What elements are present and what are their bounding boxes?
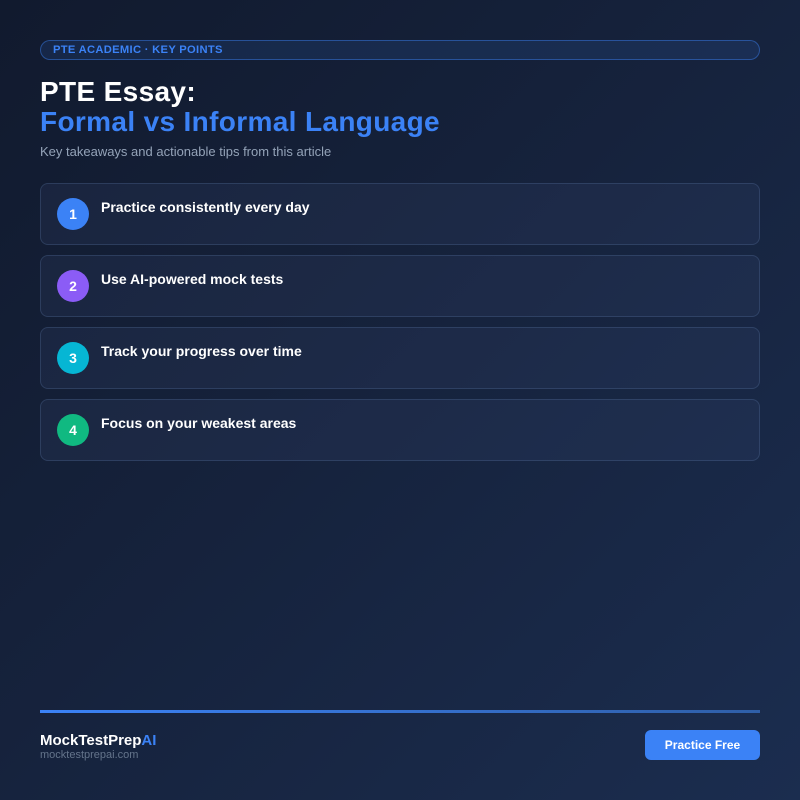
card 4: Focus on your weakest areas	[101, 415, 296, 431]
card 3: Track your progress over time	[101, 343, 302, 359]
title: PTE Essay:	[40, 76, 196, 107]
card 1: Practice consistently every day	[101, 199, 310, 215]
tag pill: PTE ACADEMIC · KEY POINTS	[53, 44, 223, 56]
card 2	[40, 255, 760, 317]
card 1: 1	[69, 206, 77, 222]
brand	[40, 732, 156, 761]
card 2: Use AI-powered mock tests	[101, 271, 283, 287]
button: Practice Free	[665, 738, 740, 752]
card 1	[40, 183, 760, 245]
brand: mocktestprepai.com	[40, 749, 138, 761]
card 4	[40, 399, 760, 461]
button	[645, 730, 760, 760]
card 4: 4	[69, 422, 77, 438]
tag pill	[40, 40, 760, 60]
card 3	[40, 327, 760, 389]
subtitle: Key takeaways and actionable tips from this article	[40, 144, 331, 159]
brand: MockTestPrepAI	[40, 732, 156, 749]
footer line	[40, 710, 760, 713]
card 2: 2	[69, 278, 77, 294]
title	[40, 76, 440, 137]
card 3: 3	[69, 350, 77, 366]
title: Formal vs Informal Language	[40, 106, 440, 137]
